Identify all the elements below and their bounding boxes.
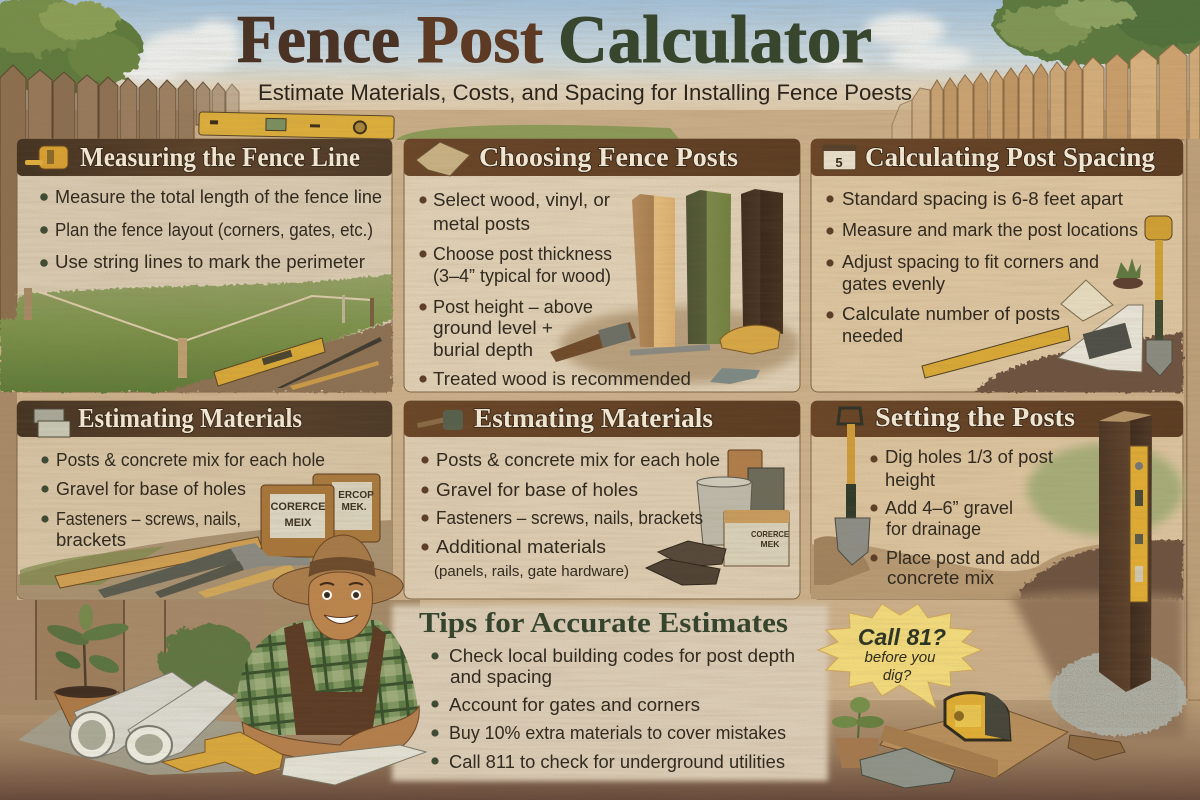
fence: right pickets bbox=[892, 44, 1200, 700]
header text: Estimating Materials bbox=[78, 403, 302, 433]
icon: toolbox bbox=[34, 409, 70, 437]
bullet list: metal posts bbox=[433, 214, 530, 234]
tips list: and spacing bbox=[450, 667, 552, 687]
bullet list: Dig holes 1/3 of post bbox=[885, 447, 1053, 467]
bullet list: Measure and mark the post locations bbox=[842, 220, 1138, 240]
bullet list: ground level + bbox=[433, 318, 553, 338]
illustration: gloves bbox=[162, 732, 283, 775]
bullet list: Gravel for base of holes bbox=[56, 479, 246, 499]
illustration: three posts bbox=[632, 189, 783, 347]
illustration: cans, concrete bag and pavers: MEK bbox=[761, 539, 780, 549]
overalls bbox=[284, 622, 386, 735]
illustration: grass field with string lines bbox=[0, 274, 392, 392]
spirit level: top bbox=[199, 112, 394, 139]
title: Calculator bbox=[558, 1, 872, 77]
icon: folded plans bbox=[416, 142, 470, 176]
illustration: smiling farmer bbox=[236, 535, 419, 762]
bullet list: Fasteners – screws, nails, bbox=[56, 509, 241, 529]
illustration: blueprint mat bbox=[18, 710, 285, 775]
header bar bbox=[811, 139, 1183, 176]
bottom wooden wall bbox=[0, 600, 420, 715]
icon: calendar bbox=[823, 145, 856, 170]
bullet list: Select wood, vinyl, or bbox=[433, 190, 610, 210]
bullet list: Calculate number of posts bbox=[842, 304, 1060, 324]
illustration: concrete bags, level and pipes: CORERCE bbox=[270, 501, 326, 513]
bullet list: Place post and add bbox=[886, 548, 1040, 568]
title bbox=[237, 1, 872, 77]
illustration: calculator bbox=[860, 748, 955, 788]
illustration: soil, level, papers and shovel bbox=[922, 216, 1183, 392]
tips list: Call 811 to check for underground utilities bbox=[449, 752, 785, 772]
tips list: Buy 10% extra materials to cover mistakes bbox=[449, 723, 786, 743]
bullet list: brackets bbox=[56, 530, 126, 550]
shirt bbox=[236, 620, 418, 735]
illustration: dirt under posts bbox=[560, 307, 800, 383]
icon: mallet bbox=[417, 410, 463, 430]
bullet list: needed bbox=[842, 326, 903, 346]
tree: left bbox=[0, 0, 143, 94]
illustration: small plant and pot bbox=[832, 697, 884, 768]
bullet list: (panels, rails, gate hardware) bbox=[434, 563, 629, 580]
bullet list: (3–4” typical for wood) bbox=[433, 266, 611, 286]
bullet list: Posts & concrete mix for each hole bbox=[436, 450, 720, 470]
bullet list: Fasteners – screws, nails, brackets bbox=[436, 508, 703, 528]
header bar bbox=[17, 139, 392, 176]
illustration: concrete bags, level and pipes bbox=[17, 474, 392, 598]
bullet list: Post height – above bbox=[433, 297, 593, 317]
icon: calendar: 5 bbox=[835, 155, 843, 170]
grass strip behind panels bbox=[396, 125, 680, 140]
bullet list bbox=[826, 189, 1138, 346]
illustration: cans, concrete bag and pavers bbox=[646, 450, 789, 585]
header bar bbox=[404, 139, 800, 176]
illustration: concrete bags, level and pipes: ERCOP bbox=[338, 490, 374, 501]
bullet list bbox=[421, 450, 720, 580]
face bbox=[309, 572, 372, 640]
panel: choosing fence posts bbox=[404, 139, 800, 392]
tips heading: Tips for Accurate Estimates bbox=[419, 608, 788, 639]
panel: estimating materials left bbox=[17, 401, 392, 599]
bullet list: Additional materials bbox=[436, 537, 606, 557]
clouds bbox=[120, 14, 972, 84]
header text: Measuring the Fence Line bbox=[80, 142, 360, 172]
header text: Calculating Post Spacing bbox=[865, 142, 1155, 172]
bullet list: Use string lines to mark the perimeter bbox=[55, 252, 365, 272]
header bar bbox=[17, 401, 392, 437]
hat crown bbox=[309, 535, 375, 576]
header text: Setting the Posts bbox=[875, 402, 1075, 432]
illustration: shovel bbox=[835, 408, 870, 565]
bullet list: Standard spacing is 6-8 feet apart bbox=[842, 189, 1123, 209]
bullet list: Adjust spacing to fit corners and bbox=[842, 252, 1099, 272]
eyes bbox=[320, 583, 363, 600]
smile bbox=[324, 615, 358, 624]
bullet list: height bbox=[885, 470, 935, 490]
header bar bbox=[404, 401, 800, 437]
bullet list: for drainage bbox=[886, 519, 981, 539]
bullet list: concrete mix bbox=[887, 568, 994, 588]
callout: call 811 starburst: before you bbox=[865, 649, 936, 666]
header bar bbox=[811, 401, 1183, 437]
hat brim bbox=[273, 565, 403, 607]
illustration: planks bbox=[880, 708, 1125, 778]
illustration: wooden post with level bbox=[1099, 411, 1152, 692]
bullet list bbox=[419, 190, 691, 389]
bullet list bbox=[41, 450, 325, 550]
illustration: blueprint rolls bbox=[70, 672, 236, 764]
fence strips along the page edges bbox=[0, 139, 1200, 699]
illustration: cans, concrete bag and pavers: CORERCE bbox=[751, 529, 789, 539]
callout: call 811 starburst: Call 81? bbox=[858, 624, 946, 650]
bullet list: Treated wood is recommended bbox=[433, 369, 691, 389]
bullet list bbox=[40, 187, 382, 272]
illustration: papers bbox=[282, 745, 426, 785]
header text: Estmating Materials bbox=[474, 403, 713, 433]
bullet list: Measure the total length of the fence line bbox=[55, 187, 382, 207]
subtitle: Estimate Materials, Costs, and Spacing for Installing Fence Poests bbox=[258, 80, 912, 105]
illustration: concrete bags, level and pipes: MEIX bbox=[285, 517, 312, 529]
panel: measuring the fence line bbox=[0, 139, 392, 392]
arms bbox=[242, 706, 419, 762]
title: Post bbox=[417, 1, 543, 77]
tips list: Account for gates and corners bbox=[449, 695, 700, 715]
illustration: potted plant bbox=[45, 604, 130, 730]
panel: tips for accurate estimates bbox=[392, 605, 828, 781]
bullet list: Gravel for base of holes bbox=[436, 480, 638, 500]
tips list bbox=[431, 646, 795, 772]
bullet list: Choose post thickness bbox=[433, 244, 612, 264]
bullet list bbox=[870, 447, 1053, 588]
icon: tape measure bbox=[25, 146, 68, 169]
panel: estimating materials centre bbox=[404, 401, 800, 599]
header text: Choosing Fence Posts bbox=[479, 142, 738, 172]
panel: setting the posts bbox=[811, 401, 1183, 599]
panel: calculating post spacing bbox=[811, 139, 1183, 392]
bullet list: burial depth bbox=[433, 340, 533, 360]
bullet list: Posts & concrete mix for each hole bbox=[56, 450, 325, 470]
illustration: shrub bbox=[160, 624, 256, 700]
dug soil below setting the posts bbox=[1010, 592, 1184, 738]
title: Fence bbox=[237, 1, 400, 77]
bullet list: gates evenly bbox=[842, 274, 945, 294]
gravel mound bbox=[1050, 652, 1186, 736]
callout: call 811 starburst: dig? bbox=[883, 667, 912, 684]
bullet list: Add 4–6” gravel bbox=[885, 498, 1013, 518]
tree: right bbox=[993, 0, 1200, 68]
bullet list: Plan the fence layout (corners, gates, etc.) bbox=[55, 220, 373, 240]
illustration: laser tape measure bbox=[945, 692, 1010, 740]
illustration: mallet, bar, gloves, bracket bbox=[550, 322, 780, 384]
callout: call 811 starburst bbox=[818, 604, 982, 708]
illustration: bush and dug soil bbox=[811, 444, 1183, 599]
illustration: concrete bags, level and pipes: MEK. bbox=[342, 502, 367, 513]
fence: left pickets bbox=[0, 65, 239, 330]
hat band bbox=[309, 557, 375, 576]
tips list: Check local building codes for post depth bbox=[449, 646, 795, 666]
